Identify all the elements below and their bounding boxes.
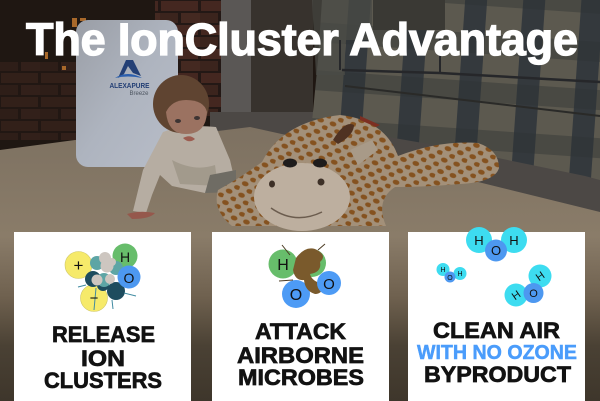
heading: attack: ATTACK bbox=[255, 319, 346, 344]
giraffe snout bbox=[254, 163, 350, 231]
panel: attack airborne microbes bbox=[212, 232, 389, 401]
icon: microbe with molecules bbox=[268, 244, 341, 308]
icon: large water molecule: O bbox=[491, 243, 501, 258]
panel: clean air bbox=[408, 227, 585, 401]
air purifier: ALEXAPURE bbox=[110, 83, 150, 90]
heading: clusters: CLUSTERS bbox=[44, 368, 162, 393]
giraffe plush bbox=[217, 115, 499, 231]
baby bbox=[127, 75, 236, 219]
icon: small water molecule: H bbox=[440, 267, 446, 274]
heading: microbes: MICROBES bbox=[238, 365, 364, 390]
icon: microbe with molecules: O bbox=[323, 276, 335, 293]
purifier logo bbox=[118, 60, 141, 78]
icon: ion cluster: H bbox=[120, 249, 130, 265]
icon: ion cluster: − bbox=[90, 290, 99, 307]
heading: airborne: AIRBORNE bbox=[237, 343, 364, 368]
icon: small water molecule bbox=[436, 263, 466, 282]
icon: small water molecule: O bbox=[447, 275, 453, 282]
air purifier: Breeze bbox=[129, 91, 149, 97]
carpet bbox=[0, 127, 600, 401]
title: The IonCluster Advantage bbox=[26, 14, 578, 65]
icon: microbe with molecules: H bbox=[277, 257, 289, 274]
icon: ion cluster: O bbox=[124, 270, 135, 286]
icon: large water molecule: H bbox=[509, 233, 519, 248]
icon: large water molecule bbox=[466, 227, 527, 262]
icon: medium water molecule: O bbox=[529, 288, 538, 300]
baby head bbox=[153, 75, 209, 133]
heading: with no ozone: WITH NO OZONE bbox=[417, 342, 577, 364]
icon: small water molecule: H bbox=[457, 271, 463, 278]
heading: release: RELEASE bbox=[52, 322, 155, 347]
icon: medium water molecule: H bbox=[510, 289, 523, 303]
icon: large water molecule: H bbox=[474, 233, 484, 248]
heading: ion: ION bbox=[81, 346, 125, 371]
fire glow bbox=[45, 18, 86, 70]
heading: clean air: CLEAN AIR bbox=[433, 318, 560, 343]
icon: medium water molecule bbox=[504, 264, 552, 306]
icon: microbe with molecules: O bbox=[290, 287, 302, 304]
icon: medium water molecule: H bbox=[534, 270, 547, 284]
air purifier bbox=[76, 20, 178, 167]
icon: ion cluster bbox=[65, 244, 140, 312]
heading: byproduct: BYPRODUCT bbox=[424, 362, 572, 387]
panel: release ion clusters bbox=[14, 232, 191, 401]
sofa bbox=[312, 0, 600, 180]
icon: ion cluster: + bbox=[74, 256, 84, 275]
